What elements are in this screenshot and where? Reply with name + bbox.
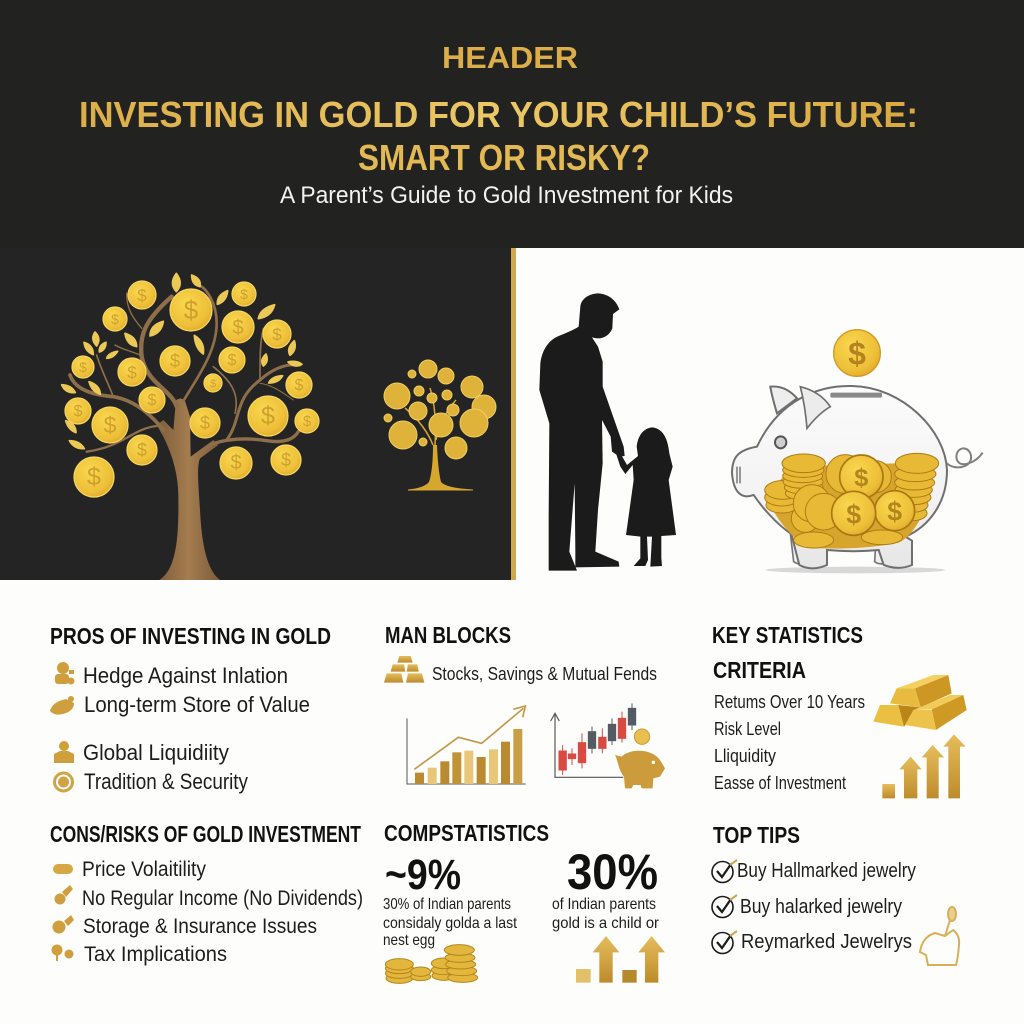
- coin pile: $: [887, 497, 902, 527]
- icon: volatility: [53, 864, 73, 874]
- text: tax: Tax Implications: [84, 943, 227, 966]
- illustration: large gold coin tree: $: [295, 377, 304, 394]
- criteria list: Risk Level: [714, 719, 781, 739]
- illustration: large gold coin tree: $: [228, 352, 237, 369]
- panel: top tips: [712, 822, 959, 965]
- illustration: large gold coin tree: $: [104, 412, 117, 438]
- title line 2: SMART OR RISKY?: [358, 137, 650, 178]
- illustration: glass piggy bank with gold coins: [732, 330, 983, 573]
- tip 1: Buy Hallmarked jewelry: [737, 860, 916, 882]
- title line 1: INVESTING IN GOLD FOR YOUR CHILD’S FUTURE:: [79, 94, 918, 135]
- stat text: right: [552, 896, 660, 932]
- stat text: left: 30% of Indian parents: [383, 896, 511, 913]
- illustration: large gold coin tree: $: [170, 351, 180, 371]
- criteria list: [714, 692, 865, 793]
- illustration: parent and child silhouette: [539, 293, 676, 571]
- panel: main blocks: [384, 622, 665, 788]
- illustration: large gold coin tree: $: [137, 286, 147, 305]
- leaves: [62, 273, 302, 449]
- heading: cons: CONS/RISKS OF GOLD INVESTMENT: [50, 821, 361, 847]
- falling coin: [834, 330, 880, 376]
- stat: 9 percent: ~9%: [385, 851, 461, 899]
- panel: dark hero with money trees: [0, 248, 511, 580]
- tip 3: Reymarked Jewelrys: [741, 931, 912, 953]
- chart: gold bar chart with trend line: [407, 706, 526, 784]
- heading: pros: PROS OF INVESTING IN GOLD: [50, 623, 331, 649]
- illustration: large gold coin tree: $: [230, 452, 242, 474]
- illustration: small gold coin tree: [384, 360, 496, 490]
- stat text: left: [383, 896, 517, 949]
- icon: gold bar stack: [873, 675, 967, 730]
- illustration: large gold coin tree: $: [79, 359, 87, 375]
- text: stocks savings: Stocks, Savings & Mutual Fends: [432, 664, 657, 684]
- icon: store of value: [50, 696, 74, 715]
- illustration: large gold coin tree: $: [232, 317, 244, 339]
- panel: pros of investing in gold: [50, 623, 331, 794]
- text: liquidity: Global Liquidiity: [83, 740, 229, 765]
- panel: comparison statistics: [383, 820, 665, 983]
- text: storage: Storage & Insurance Issues: [83, 915, 317, 938]
- illustration: large gold coin tree: $: [240, 286, 248, 302]
- heading: top tips: TOP TIPS: [713, 822, 800, 848]
- criteria list: Lliquidity: [714, 746, 776, 766]
- illustration: large gold coin tree: $: [272, 325, 282, 344]
- icon: gold coin stacks: [385, 945, 478, 983]
- icon: tradition coin: [54, 773, 72, 791]
- coin pile: $: [846, 499, 861, 529]
- text: no income: No Regular Income (No Dividends): [82, 887, 363, 910]
- header label: HEADER: [442, 40, 578, 75]
- heading: compstatistics: COMPSTATISTICS: [384, 820, 549, 846]
- text: hedge: Hedge Against Inlation: [83, 663, 288, 688]
- illustration: large gold coin tree: $: [137, 440, 147, 460]
- falling coin: $: [848, 336, 866, 372]
- illustration: large gold coin tree: $: [261, 402, 275, 430]
- panel: cons and risks: [50, 821, 363, 966]
- heading: key statistics: KEY STATISTICS: [712, 622, 863, 648]
- icon: gold bars: [384, 656, 424, 683]
- illustration: large gold coin tree: $: [210, 378, 216, 390]
- icon: tax: [52, 944, 74, 961]
- illustration: large gold coin tree: $: [303, 413, 312, 430]
- icon: hedge coins: [55, 662, 74, 684]
- stat text: left: nest egg: [383, 932, 435, 949]
- coin pile: $: [854, 464, 868, 492]
- illustration: large gold coin tree: $: [87, 463, 101, 491]
- stat: 30 percent: 30%: [567, 844, 658, 900]
- illustration: large gold coin tree: $: [74, 403, 83, 420]
- icon: rising arrows: [882, 734, 966, 798]
- illustration: large gold coin tree: $: [148, 392, 157, 409]
- text: store of value: Long-term Store of Value: [84, 692, 310, 717]
- illustration: large gold coin tree: [62, 273, 319, 580]
- criteria list: Retums Over 10 Years: [714, 692, 865, 712]
- illustration: large gold coin tree: $: [200, 413, 210, 433]
- text: tradition: Tradition & Security: [84, 769, 248, 794]
- heading: criteria: CRITERIA: [713, 657, 806, 683]
- header band: [0, 0, 1024, 248]
- tip 2: Buy halarked jewelry: [740, 896, 902, 918]
- subtitle: A Parent’s Guide to Gold Investment for Kids: [280, 182, 733, 209]
- stat text: right: gold is a child or: [552, 915, 660, 932]
- illustration: large gold coin tree: $: [127, 363, 137, 382]
- illustration: large gold coin tree: $: [281, 450, 291, 470]
- stat text: left: considaly golda a last: [383, 915, 517, 932]
- icon: storage: [52, 915, 74, 934]
- gold coins: [65, 281, 319, 497]
- panel: key statistics: [712, 622, 967, 798]
- gold divider: [511, 248, 516, 580]
- criteria list: Easse of Investment: [714, 773, 846, 793]
- illustration: large gold coin tree: $: [184, 295, 199, 325]
- stat text: right: of Indian parents: [552, 896, 656, 913]
- heading: man blocks: MAN BLOCKS: [385, 622, 511, 648]
- text: volatility: Price Volaitility: [82, 858, 206, 881]
- illustration: large gold coin tree: $: [111, 311, 119, 327]
- chart: candlesticks with gold piggy: [551, 703, 665, 788]
- coin pile: [765, 453, 939, 548]
- icon: no income: [54, 885, 73, 904]
- icon: jewelry tool: [920, 907, 959, 965]
- icon: growth arrows: [576, 936, 665, 983]
- icon: global liquidity: [54, 741, 74, 763]
